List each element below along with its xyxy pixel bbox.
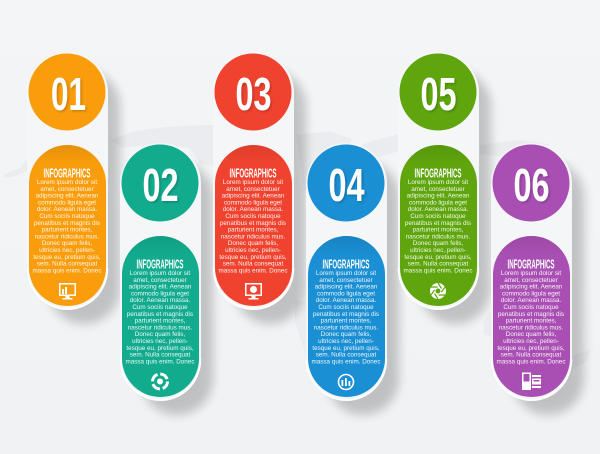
card 5 [398,52,491,324]
card 3 body text: amet, consectetuer [226,186,280,193]
card 4 body text: dolor. Aenean massa. [316,297,377,304]
card 6 number circle [492,144,570,222]
card 6 number: 06 [514,159,550,211]
card 1 body text: adipiscing elit. Aenean [36,193,99,200]
card 1 body text: dolor. Aenean massa. [37,206,98,213]
card 4 body text: ultricies nec, pellen- [318,338,374,345]
card 3 number circle [214,54,292,130]
card 1 body text: sem. Nulla consequat [37,261,98,268]
card 3 body text: Donec quam felis, [228,240,278,247]
card 2 body text: penatibus et magnis dis [127,311,193,318]
card 3 body text [219,179,287,274]
card 5 body text [404,179,472,274]
card 1 body text: tesque eu, pretium quis, [33,254,101,261]
card 4 body text: sem. Nulla consequat [316,352,377,359]
card 4: INFOGRAPHICS [322,258,370,272]
world map [4,125,591,369]
card 2 body text: Lorem ipsum dolor sit [130,270,190,277]
card 5 body text: sem. Nulla consequat [408,261,469,268]
card 6 body text: tesque eu, pretium quis, [497,345,565,352]
card 1 number: 01 [51,68,86,120]
card 6 body text: penatibus et magnis dis [498,311,564,318]
card 1 body text: nascetur ridiculus mus. [35,233,99,240]
card 6 body text: parturient montes, [506,318,557,325]
card 1 shadow [48,70,120,324]
card 4 body text: penatibus et magnis dis [313,311,379,318]
card 2 number circle [122,144,198,222]
card 6 body text: amet, consectetuer [504,277,558,284]
card 5: INFOGRAPHICS [414,166,462,180]
card 1 body text: penatibus et magnis dis [34,220,100,227]
card 1 white rim [28,268,108,309]
card 3 body text: adipiscing elit. Aenean [222,193,285,200]
card 1 body text [33,179,101,274]
card 5 body text: adipiscing elit. Aenean [407,193,470,200]
card 4 number circle [308,144,384,222]
card 4 body text: Lorem ipsum dolor sit [316,270,376,277]
card 5 body text: tesque eu, pretium quis, [404,254,472,261]
card 2 body text: ultricies nec, pellen- [132,338,188,345]
card 2 body text [126,270,194,365]
card 3 number: 03 [236,68,272,120]
card 3 body text: Cum sociis natoque [225,213,281,220]
card 3 body text: massa quis enim. Donec [219,267,287,274]
card 2 body text: dolor. Aenean massa. [130,297,191,304]
card 2 white rim [120,359,200,400]
card 2 body text: massa quis enim. Donec [126,358,194,365]
card 6 white rim [492,359,572,400]
card 1 body text: Lorem ipsum dolor sit [37,179,97,186]
card 4 body text: adipiscing elit. Aenean [315,284,378,291]
card 2: INFOGRAPHICS [136,258,184,272]
card 5 body text: Donec quam felis, [413,240,463,247]
card 1 body text: ultricies nec, pellen- [39,247,95,254]
card 5 body text: massa quis enim. Donec [404,267,472,274]
card 5 shadow [419,70,491,324]
card 2 body text: Donec quam felis, [135,331,185,338]
card 5 number: 05 [420,68,456,120]
card 1 body text: massa quis enim. Donec [33,267,101,274]
card 6 colored pill [493,236,570,397]
card 5 colored pill [400,145,477,306]
card 2 body text: sem. Nulla consequat [130,352,191,359]
card 5 body text: ultricies nec, pellen- [410,247,466,254]
icon: monitor [59,283,76,300]
card 6 body text: nascetur ridiculus mus. [499,324,563,331]
card 2 white pill [120,143,201,401]
card 2 body text: tesque eu, pretium quis, [126,345,194,352]
card 4 body text: tesque eu, pretium quis, [312,345,380,352]
card 4 body text: nascetur ridiculus mus. [314,324,378,331]
card 6 body text: Cum sociis natoque [503,304,559,311]
card 3 body text: ultricies nec, pellen- [225,247,281,254]
card 6 body text: Donec quam felis, [506,331,556,338]
card 1: INFOGRAPHICS [44,166,90,180]
card 1 body text: parturient montes, [42,227,93,234]
card 3 white rim [214,268,294,309]
card 2 body text: nascetur ridiculus mus. [128,324,192,331]
icon: phone and card [522,372,541,390]
card 1 body text: amet, consectetuer [40,186,94,193]
card 4 body text: Cum sociis natoque [318,304,374,311]
card 4 colored pill [308,236,385,397]
card 6 body text [497,270,565,365]
card 1 body text: Donec quam felis, [42,240,92,247]
card 5 white pill [398,52,479,310]
icon: target arrows [152,374,168,389]
card 2 colored pill [122,236,199,397]
card 6 white pill [491,143,572,401]
card 6 body text: sem. Nulla consequat [501,352,562,359]
card 3 body text: dolor. Aenean massa. [223,206,284,213]
card 5 number circle [400,54,476,130]
card 5 body text: amet, consectetuer [411,186,465,193]
card 3 body text: sem. Nulla consequat [223,261,284,268]
card 4 number: 04 [328,159,365,211]
card 6 body text: massa quis enim. Donec [497,358,565,365]
card 4 body text: massa quis enim. Donec [312,358,380,365]
card 6 [491,143,584,415]
card 5 body text: nascetur ridiculus mus. [406,233,470,240]
card 5 body text: penatibus et magnis dis [405,220,471,227]
card 4 white rim [306,359,386,400]
card 6 body text: adipiscing elit. Aenean [500,284,563,291]
card 1 colored pill [29,145,106,306]
card 6 body text: ultricies nec, pellen- [503,338,559,345]
card 3 body text: nascetur ridiculus mus. [221,233,285,240]
card 2 body text: commodo ligula eget [131,290,189,297]
icon: round chart badge [338,374,354,390]
card 4 shadow [327,161,399,415]
card 5 white rim [398,268,478,309]
icon: monitor with pie chart [245,283,262,300]
card 5 body text: Cum sociis natoque [410,213,466,220]
card 3 body text: tesque eu, pretium quis, [219,254,287,261]
card 4 body text: commodo ligula eget [317,290,375,297]
card 5 body text: commodo ligula eget [409,199,467,206]
card 6 body text: dolor. Aenean massa. [501,297,562,304]
card 1 body text: commodo ligula eget [38,199,96,206]
card 4 white pill [306,143,387,401]
card 5 body text: parturient montes, [413,227,464,234]
card 1 body text: Cum sociis natoque [39,213,95,220]
card 3 colored pill [215,145,292,306]
card 3 body text: Lorem ipsum dolor sit [223,179,283,186]
card 2 body text: Cum sociis natoque [132,304,188,311]
card 3 shadow [234,70,306,324]
card 1 number circle [28,54,106,130]
card 2 [120,143,213,415]
card 5 body text: dolor. Aenean massa. [408,206,469,213]
card 3 body text: penatibus et magnis dis [220,220,286,227]
card 4 body text: parturient montes, [321,318,372,325]
card 3 [213,52,306,324]
card 1 white pill [27,52,108,310]
card 2 number: 02 [142,159,178,211]
card 2 shadow [141,161,213,415]
card 3: INFOGRAPHICS [230,166,276,180]
card 6 body text: Lorem ipsum dolor sit [501,270,561,277]
card 2 body text: adipiscing elit. Aenean [129,284,192,291]
card 3 body text: commodo ligula eget [224,199,282,206]
card 4 body text: amet, consectetuer [319,277,373,284]
card 3 body text: parturient montes, [228,227,279,234]
card 5 body text: Lorem ipsum dolor sit [408,179,468,186]
card 4 body text: Donec quam felis, [321,331,371,338]
icon: camera aperture [430,283,446,299]
card 4 body text [312,270,380,365]
card 2 body text: amet, consectetuer [133,277,187,284]
card 6 body text: commodo ligula eget [502,290,560,297]
card 6 shadow [512,161,584,415]
card 1 [27,52,120,324]
card 2 body text: parturient montes, [135,318,186,325]
card 4 [306,143,399,415]
card 3 white pill [213,52,294,310]
